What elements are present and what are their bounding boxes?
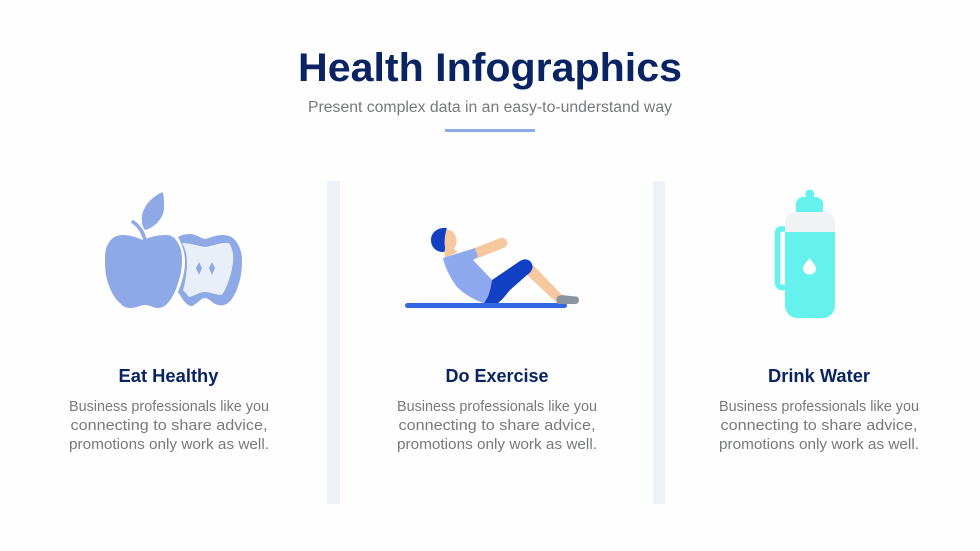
subtitle: Present complex data in an easy-to-understand way (308, 99, 672, 116)
head (438, 230, 456, 252)
heading underline (445, 129, 535, 132)
back arm (474, 243, 502, 254)
bottle cap (796, 190, 823, 212)
title: Health Infographics (298, 46, 682, 90)
description: do exercise: connecting to share advice, (398, 417, 596, 434)
description: drink water: promotions only work as well. (719, 436, 919, 453)
bottle body (785, 232, 835, 318)
exercise mat (405, 303, 567, 308)
icon: apple (105, 192, 242, 308)
lower leg (527, 265, 563, 303)
shorts (484, 259, 533, 303)
heading: eat healthy: Eat Healthy (118, 366, 218, 386)
description: do exercise: promotions only work as well. (397, 436, 597, 453)
description: eat healthy: Business professionals like you (69, 398, 269, 415)
shoe (556, 295, 579, 304)
apple stem (133, 222, 145, 240)
description: drink water: connecting to share advice, (720, 417, 918, 434)
shirt (443, 248, 492, 303)
panel: do exercise (397, 228, 597, 453)
apple body (105, 235, 182, 308)
description: eat healthy (69, 398, 269, 453)
description: do exercise: Business professionals like you (397, 398, 597, 415)
bottle top (785, 212, 835, 232)
hair (431, 228, 447, 252)
heading: drink water: Drink Water (768, 366, 870, 386)
description: eat healthy: promotions only work as well. (69, 436, 269, 453)
panel: eat healthy (69, 192, 269, 453)
panel divider: left (327, 181, 340, 504)
bottle handle (778, 229, 786, 288)
neck (444, 249, 458, 258)
panel divider: right (653, 181, 665, 504)
description: do exercise (397, 398, 597, 453)
panel: drink water (719, 190, 919, 453)
icon: person doing sit-ups (405, 228, 579, 308)
icon: water bottle (778, 190, 835, 318)
description: drink water (719, 398, 919, 453)
apple leaf (142, 192, 164, 230)
water drop (803, 258, 816, 274)
description: eat healthy: connecting to share advice, (70, 417, 268, 434)
cut apple half (178, 234, 242, 306)
heading: do exercise: Do Exercise (446, 366, 548, 386)
description: drink water: Business professionals like you (719, 398, 919, 415)
